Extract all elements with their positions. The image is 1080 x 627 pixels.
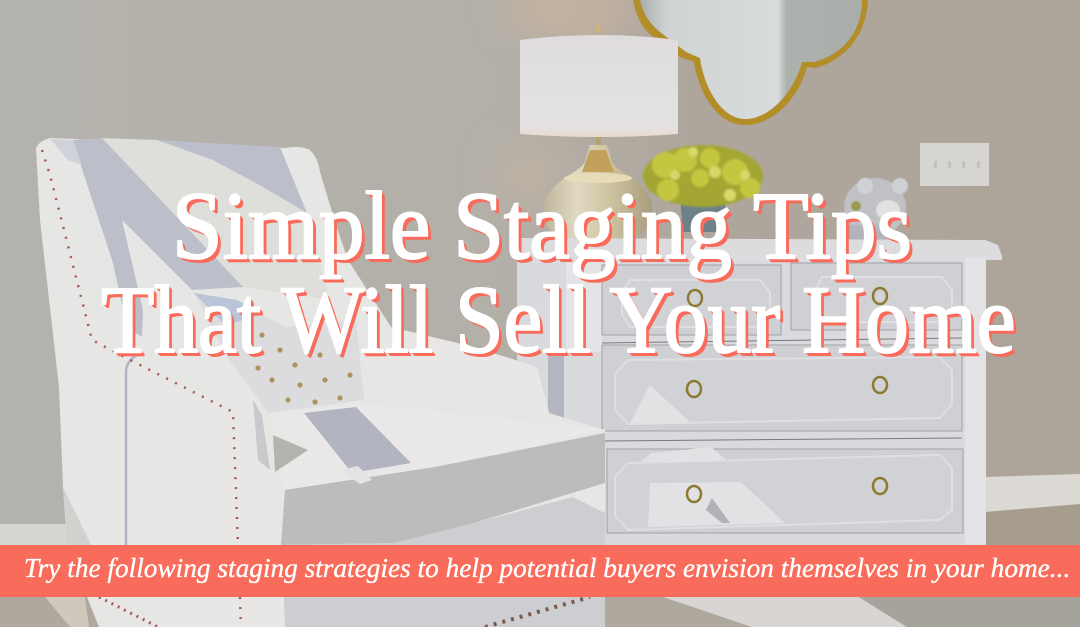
- polka-dot pillow: [194, 293, 364, 413]
- banner: subtitle strip: Try the following staging strategies to help potential buyers envision themselves in your home...: [24, 553, 1070, 583]
- chair back: [36, 138, 605, 627]
- drawer fronts: [602, 263, 963, 533]
- flowers and vase: [643, 145, 763, 232]
- seat cushion front: [281, 433, 605, 545]
- baseboard and carpet: [0, 474, 1080, 627]
- sunlight patches: [630, 385, 785, 527]
- wall wedge beside chair: [63, 487, 91, 545]
- mirror: [633, 0, 868, 125]
- sunlit back: [102, 138, 330, 300]
- armchair: [36, 138, 605, 627]
- arm triangle shadow: [273, 435, 308, 472]
- banner: subtitle strip: [0, 545, 1080, 597]
- piggy bank: [844, 178, 908, 240]
- drawer ring pulls: [687, 288, 887, 502]
- warm lamp glow on wall: [495, 0, 635, 210]
- back shadows: [73, 138, 243, 337]
- wall light switch: [920, 143, 989, 186]
- arm: [70, 360, 285, 627]
- back cushion: [364, 332, 549, 413]
- title line 2: That Will Sell Your Home: [101, 266, 1016, 373]
- drawer chamfered panels: [615, 277, 952, 530]
- seat shadow: [304, 407, 411, 473]
- title line 1: Simple Staging Tips: [172, 172, 912, 279]
- seat cushion top: [269, 403, 605, 490]
- wood legs: [45, 597, 89, 627]
- title: [101, 172, 1016, 373]
- lamp: [520, 20, 678, 241]
- dresser: [517, 238, 1002, 550]
- nailhead trim: [42, 150, 241, 627]
- gap shadow between chair and dresser: [548, 353, 564, 418]
- blue-gray seam: [126, 354, 140, 545]
